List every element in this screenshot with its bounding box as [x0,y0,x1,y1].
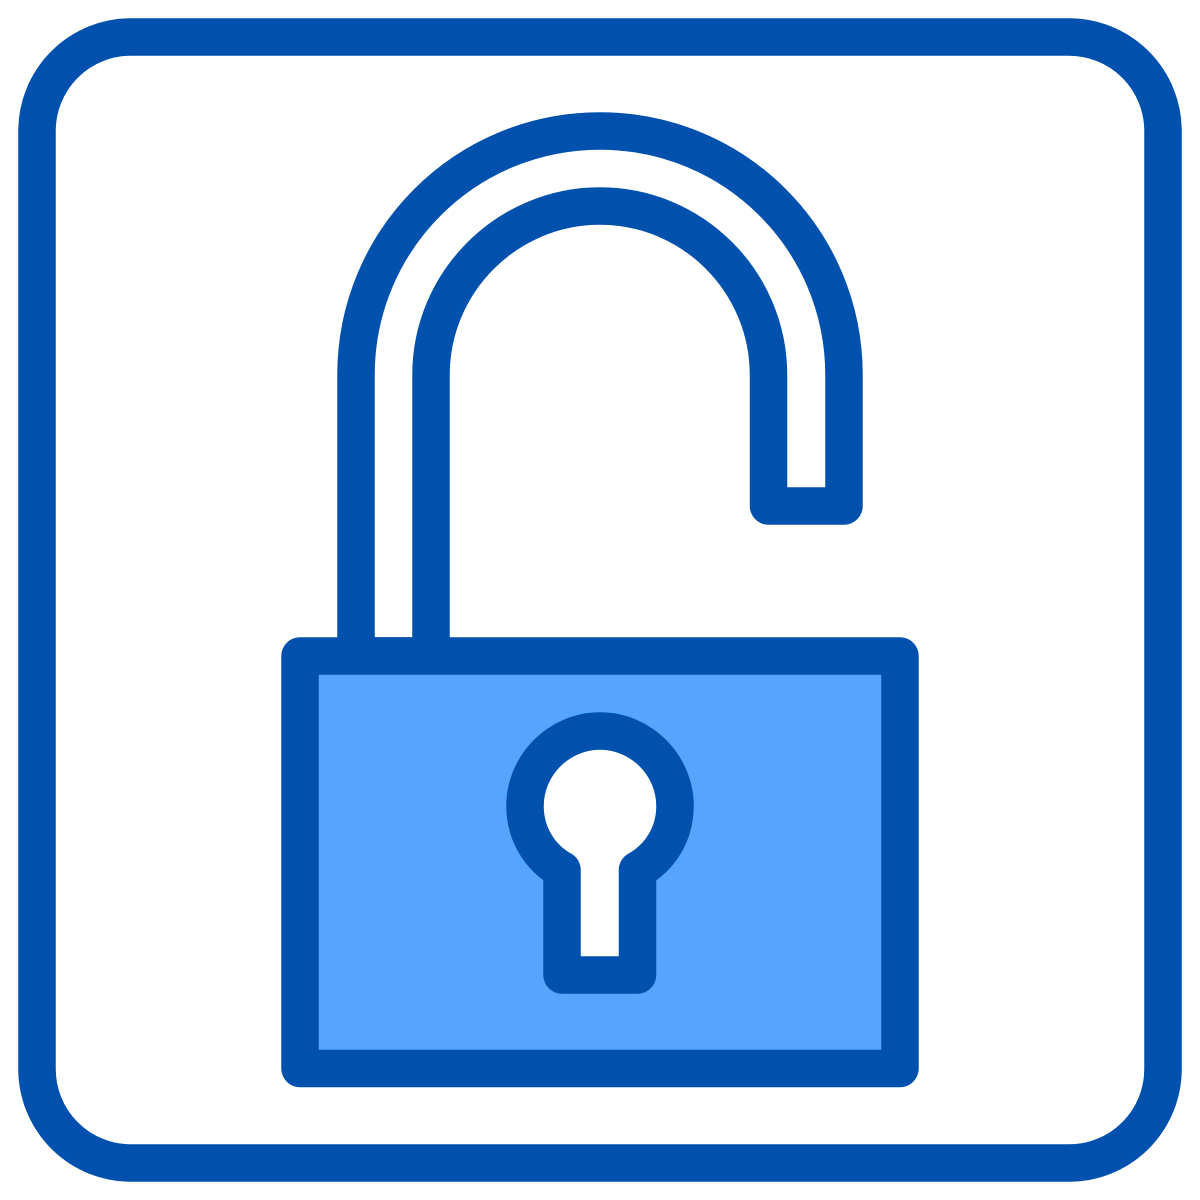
padlock shackle [356,131,844,656]
padlock body [300,656,900,1068]
keyhole [525,731,675,975]
